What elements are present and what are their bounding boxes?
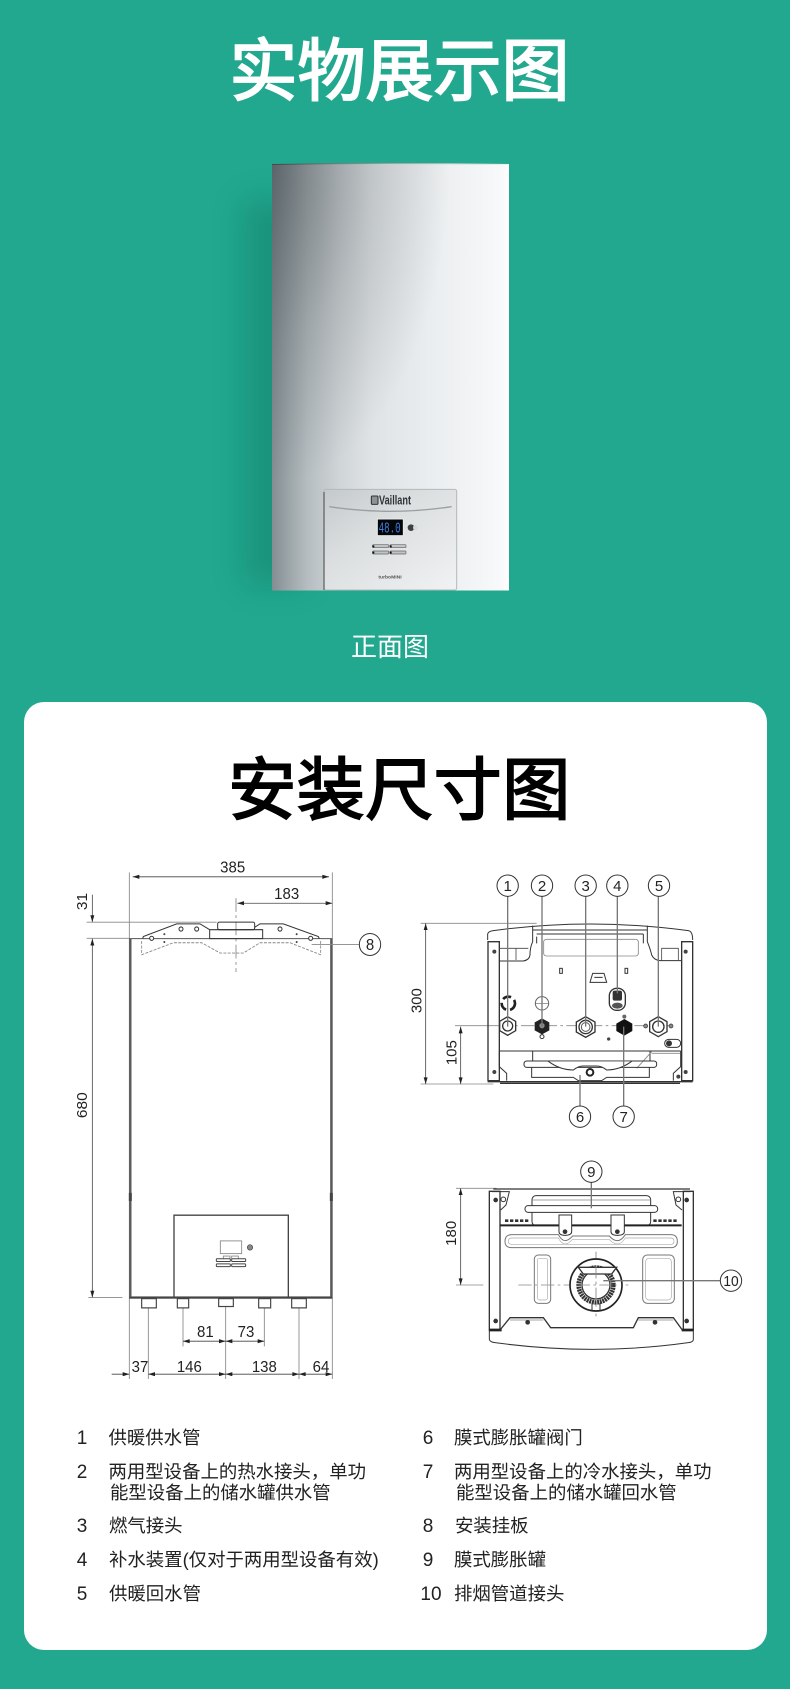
- legend item 3: [77, 1515, 183, 1537]
- callout 8: [312, 933, 381, 955]
- casing outline: [488, 924, 693, 1083]
- legend item 2: 能型设备上的储水罐供水管: [110, 1482, 331, 1503]
- product photo: wall-hung boiler: [244, 164, 509, 590]
- mounting bracket: [142, 922, 321, 955]
- diagram: front view with dimensions: [74, 859, 381, 1379]
- legend item 2: [77, 1461, 366, 1503]
- expansion tank: [500, 1196, 682, 1235]
- legend item 8: 8: [423, 1516, 433, 1537]
- numbered callouts 1-7: 6: [576, 1109, 584, 1126]
- connectors row: [500, 997, 681, 1047]
- legend item 7: 两用型设备上的冷水接头，单功: [454, 1461, 711, 1482]
- boiler cast shadow: [244, 200, 304, 585]
- callout leaders: [508, 896, 658, 1106]
- dimension values: 680: [74, 1092, 91, 1118]
- dimension lines: 180: [443, 1221, 460, 1246]
- control knob: [408, 524, 414, 531]
- legend item 1: 供暖供水管: [108, 1427, 200, 1448]
- callout 8: 8: [366, 937, 374, 954]
- callout 10: 10: [723, 1273, 739, 1290]
- legend item 2: 2: [77, 1462, 87, 1483]
- dimension values: 64: [313, 1359, 330, 1376]
- connector: fill valve: [609, 988, 625, 1010]
- callout 9: 9: [587, 1164, 596, 1181]
- casing outline: [489, 1189, 693, 1349]
- legend item 3: 燃气接头: [109, 1515, 183, 1536]
- legend item 4: 补水装置(仅对于两用型设备有效): [109, 1549, 379, 1570]
- Vaillant logo: Vaillant: [379, 493, 411, 508]
- legend item 10: 10: [420, 1584, 442, 1605]
- legend item 2: 两用型设备上的热水接头，单功: [108, 1461, 366, 1482]
- dimension values: 138: [252, 1359, 277, 1376]
- dimension values: 183: [274, 886, 299, 903]
- legend item 10: 排烟管道接头: [454, 1583, 564, 1604]
- dimension lines: [409, 923, 670, 1084]
- boiler outline: [129, 939, 332, 1298]
- dimension values: 81: [197, 1324, 214, 1341]
- legend item 7: [423, 1461, 711, 1503]
- panel: installation dimensions card: [24, 702, 767, 1650]
- numbered callouts 1-7: 4: [613, 878, 622, 895]
- legend item 1: 1: [77, 1428, 87, 1449]
- numbered callouts 1-7: 1: [503, 878, 512, 895]
- legend item 7: 7: [423, 1462, 433, 1483]
- stamped slots: [505, 1235, 677, 1303]
- heading: 安装尺寸图: 安装尺寸图: [228, 753, 571, 829]
- legend item 8: 安装挂板: [455, 1515, 529, 1536]
- boiler casing: [272, 164, 509, 590]
- callout 9: [581, 1161, 602, 1208]
- control panel: [324, 489, 457, 590]
- dimension lines: [87, 872, 332, 1379]
- diagram: top view with expansion tank and flue: [443, 1161, 742, 1349]
- legend item 7: 能型设备上的储水罐回水管: [456, 1482, 677, 1503]
- model name: turboMINI: [378, 575, 402, 581]
- legend item 4: 4: [77, 1550, 88, 1571]
- dimension lines: 300: [409, 988, 426, 1013]
- dimension values: 73: [238, 1324, 254, 1341]
- title: 实物展示图: 实物展示图: [229, 34, 570, 110]
- control panel outline: [174, 1215, 288, 1298]
- pipe connectors: [142, 1299, 306, 1308]
- legend item 9: 膜式膨胀罐: [454, 1549, 546, 1570]
- numbered callouts 1-7: 3: [581, 878, 590, 895]
- dimension values: [74, 859, 330, 1376]
- numbered callouts 1-7: [497, 875, 670, 1127]
- legend item 6: 膜式膨胀罐阀门: [454, 1427, 583, 1448]
- diagram: underside view with connections: [409, 875, 693, 1127]
- legend item 5: 供暖回水管: [109, 1583, 201, 1604]
- callout 10: [603, 1270, 742, 1291]
- dimension values: 37: [132, 1359, 148, 1376]
- dimension values: 31: [74, 893, 91, 910]
- dimension values: 146: [177, 1359, 202, 1376]
- digital display: 48.0: [379, 522, 401, 538]
- flue connection: [570, 1259, 622, 1311]
- expansion tank bracket: [499, 1051, 681, 1081]
- dimension lines: [443, 1188, 632, 1318]
- legend item 5: 5: [77, 1584, 87, 1605]
- numbered callouts 1-7: 7: [619, 1109, 628, 1126]
- legend item 9: 9: [423, 1550, 433, 1571]
- legend item 6: 6: [423, 1428, 433, 1449]
- numbered callouts 1-7: 2: [538, 878, 546, 895]
- numbered callouts 1-7: 5: [655, 878, 663, 895]
- legend item 8: [423, 1515, 529, 1537]
- legend: right column: [420, 1427, 711, 1605]
- dimension values: 385: [220, 859, 245, 877]
- legend item 3: 3: [77, 1516, 87, 1537]
- legend: left column: [77, 1427, 379, 1605]
- dimension lines: 105: [444, 1040, 461, 1065]
- buttons: [373, 545, 406, 554]
- caption: 正面图: 正面图: [351, 632, 429, 662]
